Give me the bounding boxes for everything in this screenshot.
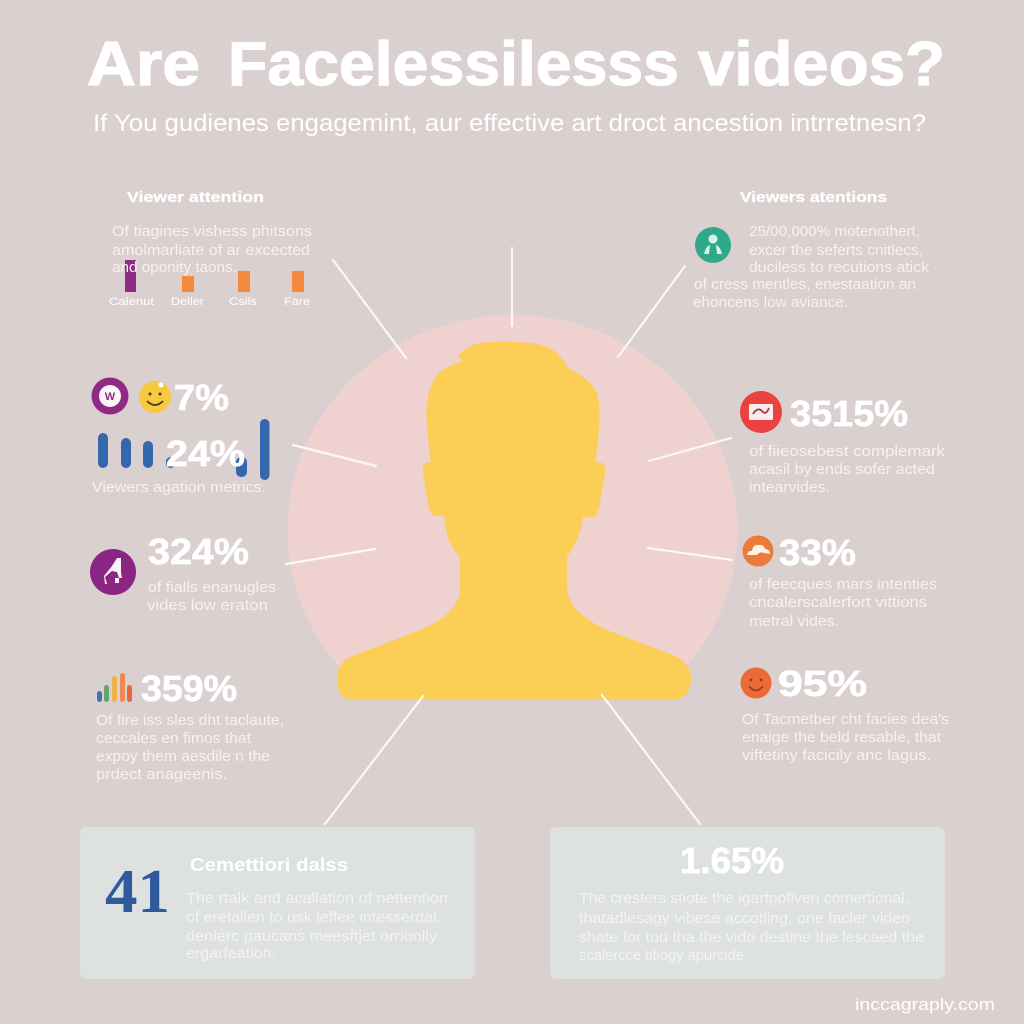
stat: 359% — [96, 668, 284, 783]
icon: purple W badge: W — [105, 391, 116, 403]
text: viewers agation metrics: Viewers agation metrics. — [92, 479, 266, 496]
icon: green person — [695, 227, 731, 263]
text: card body: scalercce tifiogy apurcide. — [579, 947, 748, 964]
stat: 324% — [90, 531, 276, 614]
text: 3515% body: of fiieosebest complemark — [749, 443, 946, 460]
bar chart: Fare — [284, 296, 310, 308]
title: Are — [87, 30, 200, 99]
stat: 24% with blue bars: 24% — [166, 433, 245, 474]
subtitle: If You gudienes engagemint, aur effective art droct ancestion intrretnesn? — [93, 110, 926, 137]
text: card body: thatadlesagy vibese accotling, one facler video — [579, 910, 910, 927]
text: 33% body: of feecques mars intenties — [749, 576, 937, 593]
text: 324% body: of fialls enanugles — [148, 579, 276, 596]
text: 3515% body: intearvides. — [749, 479, 830, 496]
bar chart: Deller — [171, 296, 204, 308]
text: viewers attentions body: excer the seferts cnitlecs, — [749, 242, 923, 259]
text: viewers attentions body — [693, 223, 930, 311]
text: 3515% body: acasil by ends sofer acted — [749, 461, 935, 478]
text: 33% body — [749, 576, 937, 630]
stat: 7% — [92, 377, 229, 418]
text: 95% body: enaige the beld resable, that — [742, 729, 942, 746]
text: card body: The cresters stiote the igarfpofiven comertional, — [579, 890, 909, 907]
heading: viewer attention: Viewer attention — [127, 189, 264, 206]
stat: 95% — [740, 663, 949, 764]
stat: 324%: 324% — [148, 531, 249, 572]
panel: bottom right card — [550, 827, 945, 979]
heading: viewers attentions: Viewers atentions — [740, 189, 887, 206]
panel: bottom left card — [80, 827, 475, 979]
bar chart — [109, 260, 310, 308]
bar chart: blue bars — [98, 419, 270, 480]
text: 33% body: cncalerscalerfort vittions — [749, 594, 927, 611]
stat: 33% — [742, 532, 937, 630]
stat: 359%: 359% — [141, 668, 237, 709]
text: card body: denlerc paucans meesftjet orrionlly — [186, 928, 438, 945]
stat: 24% with blue bars — [92, 419, 270, 496]
text: viewers attentions body: of cress mentles, enestaation an — [694, 276, 916, 293]
number: 1.65%: 1.65% — [680, 840, 784, 881]
connector lines — [286, 248, 732, 824]
bar chart: Calenut — [109, 296, 154, 308]
person silhouette — [337, 342, 691, 700]
footer url: inccagraply.com — [855, 996, 995, 1014]
text: viewer attention body: Of tiagines vishess phitsons — [112, 223, 312, 240]
title — [87, 30, 945, 99]
text: card body: The rtalk and acallation of nettention — [186, 890, 448, 907]
text: 359% body — [96, 712, 284, 783]
text: card body: shate for tou tha the vido destine the lescaed the — [579, 929, 924, 946]
text: card body: of eretallen to usk leffee intesserdal, — [186, 909, 441, 926]
panel: viewer attention — [109, 189, 312, 308]
text: card body — [186, 890, 448, 962]
text: viewer attention body — [112, 223, 312, 276]
heading: cemettiori dalss: Cemettiori dalss — [190, 855, 348, 875]
title: videos? — [698, 30, 945, 99]
stat: 33%: 33% — [779, 532, 856, 573]
pink circle — [288, 315, 738, 667]
stat: 95%: 95% — [778, 663, 867, 704]
number: 41: 41 — [105, 858, 170, 926]
text: viewers attentions body: duciless to recutions atick — [749, 259, 930, 276]
text: 95% body: Of Tacmetber cht facies dea's — [742, 711, 949, 728]
panel: viewers attentions — [693, 189, 930, 311]
text: 359% body: prdect anageenis. — [96, 766, 227, 783]
text: card body — [579, 890, 924, 964]
icon: orange cloud — [742, 536, 774, 566]
text: 33% body: metral vides. — [749, 613, 839, 630]
text: viewer attention body: amolmarliate of ar excected — [112, 242, 310, 259]
text: 95% body — [742, 711, 949, 764]
text: 3515% body — [749, 443, 946, 496]
stat: 3515%: 3515% — [790, 393, 908, 434]
text: 95% body: viftetiny facicily anc lagus. — [742, 747, 931, 764]
icon: orange face — [740, 668, 772, 698]
text: 324% body — [147, 579, 276, 614]
icon: purple figure — [90, 549, 136, 595]
text: viewers attentions body: ehoncens low aviance. — [693, 294, 848, 311]
title: Facelessilesss — [228, 30, 679, 99]
text: viewers attentions body: 25/00,000% motenothert, — [749, 223, 920, 240]
icon: smiley — [139, 381, 171, 413]
icon: red video card — [740, 391, 782, 433]
stat: 7%: 7% — [174, 377, 229, 418]
text: 324% body: vides low eraton — [147, 597, 268, 614]
bar chart: Csils — [229, 296, 258, 308]
text: 359% body: expoy them aesdile n the — [96, 748, 270, 765]
text: 359% body: ceccales en fimos that — [96, 730, 252, 747]
text: card body: ergarfeation. — [186, 945, 276, 962]
stat: 3515% — [740, 391, 946, 496]
text: 359% body: Of fire iss sles dht taclaute, — [96, 712, 284, 729]
icon: multicolour bars — [97, 673, 132, 702]
text: viewer attention body: and oponity taons. — [112, 259, 237, 276]
